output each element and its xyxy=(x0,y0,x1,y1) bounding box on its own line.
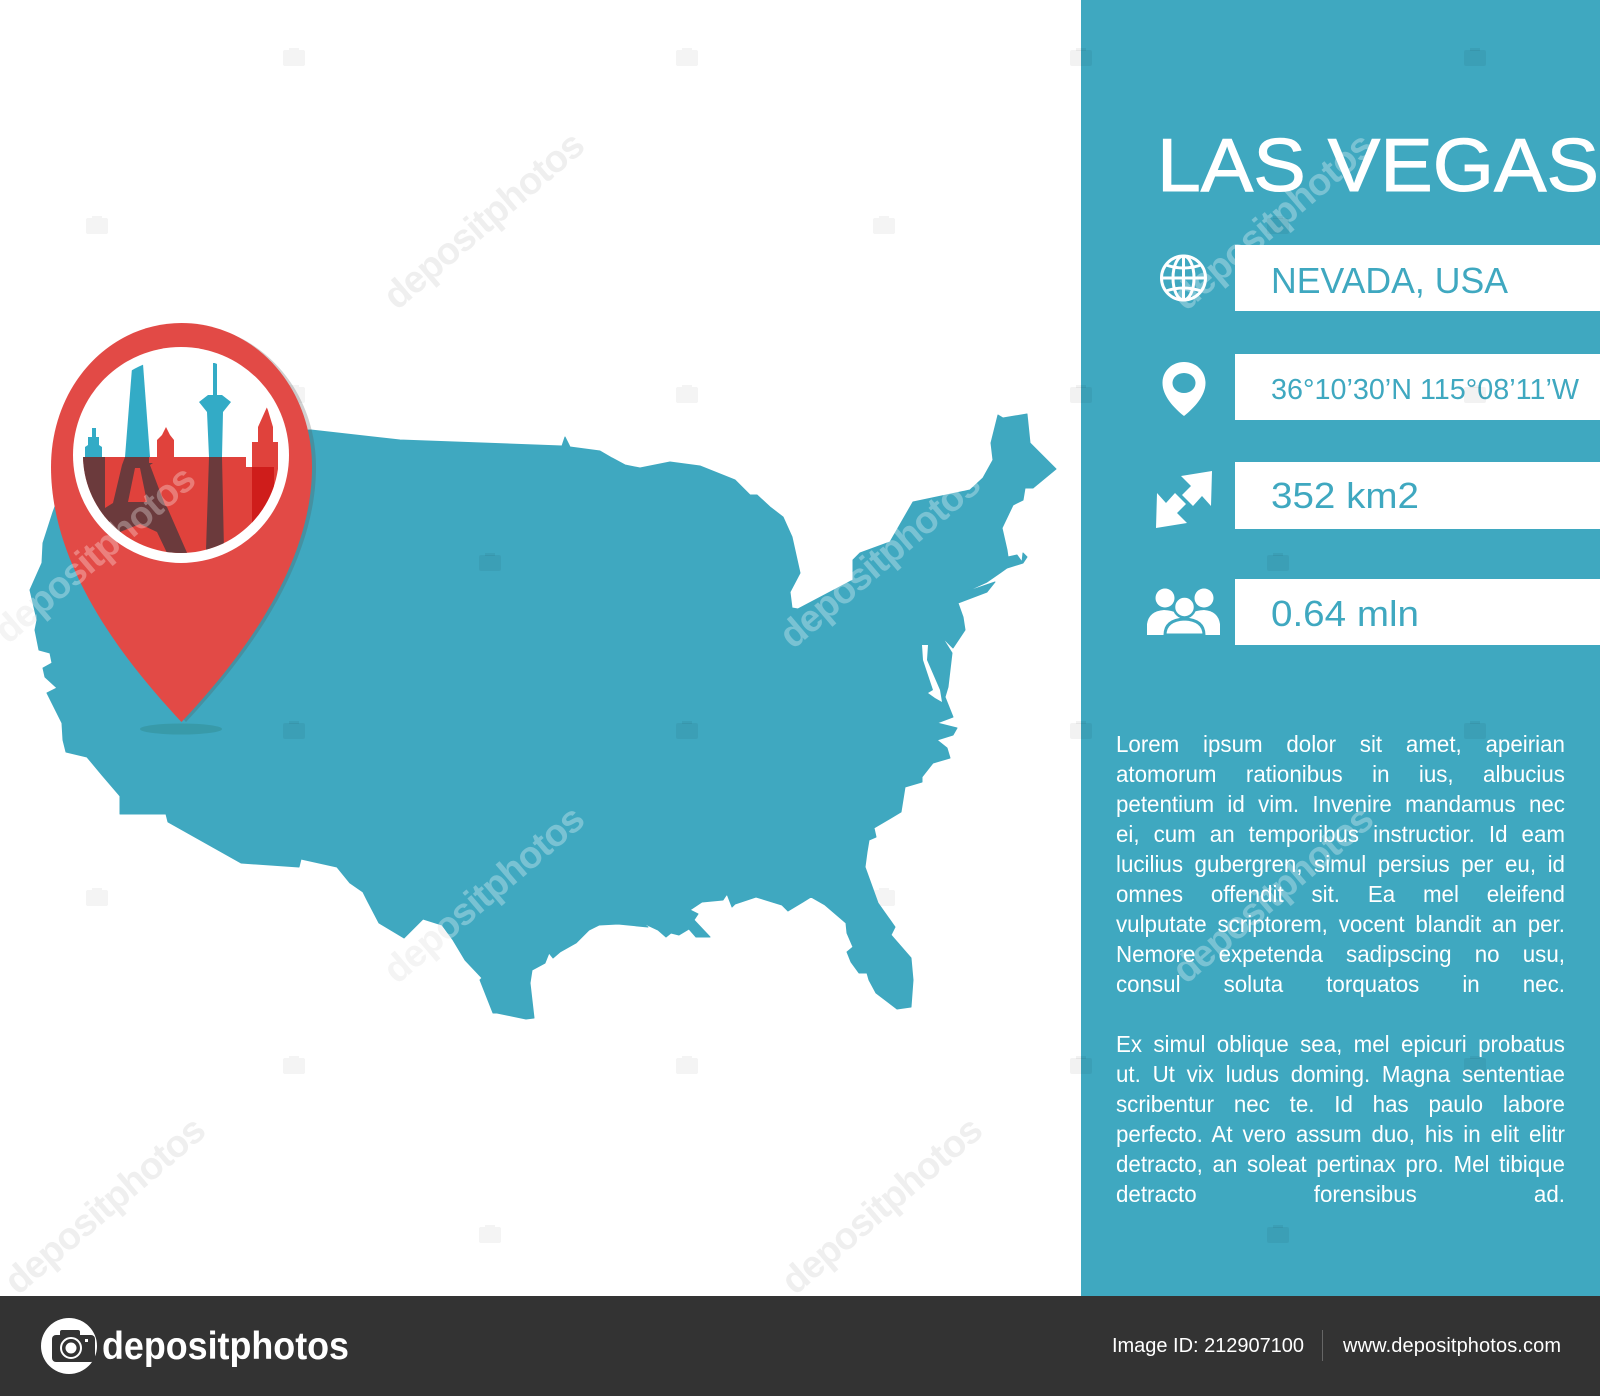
city title: LAS VEGAS xyxy=(1157,123,1599,207)
description text block: Ex simul oblique sea, mel epicuri probatus xyxy=(1116,1031,1565,1057)
info row: region xyxy=(1235,245,1600,311)
description text block: ei, cum an temporibus instructior. Id eam xyxy=(1116,821,1565,847)
icon: globe xyxy=(1162,256,1206,300)
description text block xyxy=(1116,731,1565,1207)
footer logo wordmark: depositphotos xyxy=(102,1325,349,1368)
watermarks on white background: depositphotos xyxy=(376,798,593,992)
info row: population xyxy=(1235,579,1600,645)
watermarks on white background xyxy=(0,124,991,1303)
icon: location pin xyxy=(1162,362,1206,416)
description text block: Nemore expetenda sadipscing no usu, xyxy=(1116,941,1565,967)
description text block: perfecto. At vero assum duo, his in elit elitr xyxy=(1116,1121,1565,1147)
watermarks over coloured areas: depositphotos xyxy=(1165,798,1382,992)
info row: region: NEVADA, USA xyxy=(1271,260,1508,301)
footer image id: Image ID: 212907100 xyxy=(1112,1335,1304,1357)
footer logo: camera badge xyxy=(41,1318,97,1374)
small camera watermark icons on panel xyxy=(283,48,1486,1243)
watermarks on white background: depositphotos xyxy=(774,1109,991,1303)
info row: area xyxy=(1235,462,1600,529)
description text block: lucilius gubergren, simul persius per eu, id xyxy=(1116,851,1565,877)
description text block: consul soluta torquatos in nec. xyxy=(1116,971,1565,997)
pin ground shadow xyxy=(140,724,222,734)
description text block: atomorum rationibus in ius, albucius xyxy=(1116,761,1565,787)
panel: city information background xyxy=(1081,0,1600,1296)
skyline illustration xyxy=(83,363,278,553)
description text block: ut. Ut vix ludus doming. Magna sententiae xyxy=(1116,1061,1565,1087)
description text block: petentium id vim. Invenire mandamus nec xyxy=(1116,791,1565,817)
icon: area arrows xyxy=(1156,471,1212,528)
icon: population group xyxy=(1147,588,1220,635)
description text block: Lorem ipsum dolor sit amet, apeirian xyxy=(1116,731,1565,757)
description text block: vulputate scriptorem, vocent blandit an per. xyxy=(1116,911,1565,937)
info row: area: 352 km2 xyxy=(1271,475,1419,516)
watermarks on white background: depositphotos xyxy=(376,124,593,318)
watermarks over coloured areas: depositphotos xyxy=(376,798,593,992)
info row: population: 0.64 mln xyxy=(1271,593,1419,634)
description text block: detracto, an soleat pertinax pro. Mel tibique xyxy=(1116,1151,1565,1177)
map: contiguous United States xyxy=(30,414,1056,1019)
footer bar xyxy=(0,1296,1600,1396)
small camera watermark icons on white xyxy=(86,48,895,1243)
pin drop shadow xyxy=(57,325,316,722)
watermarks on white background: depositphotos xyxy=(0,1109,214,1303)
description text block: detracto forensibus ad. xyxy=(1116,1181,1565,1207)
footer website: www.depositphotos.com xyxy=(1342,1335,1561,1357)
description text block: scribentur nec te. Id has paulo labore xyxy=(1116,1091,1565,1117)
info row: coordinates xyxy=(1235,354,1600,420)
description text block: omnes offendit sit. Ea mel eleifend xyxy=(1116,881,1565,907)
watermarks over coloured areas xyxy=(0,125,1382,992)
watermarks over coloured areas: depositphotos xyxy=(1165,125,1382,319)
info row: coordinates: 36°10’30’N 115°08’11’W xyxy=(1271,374,1580,406)
watermarks over coloured areas: depositphotos xyxy=(772,463,989,657)
map pin with Las Vegas skyline xyxy=(51,323,312,722)
